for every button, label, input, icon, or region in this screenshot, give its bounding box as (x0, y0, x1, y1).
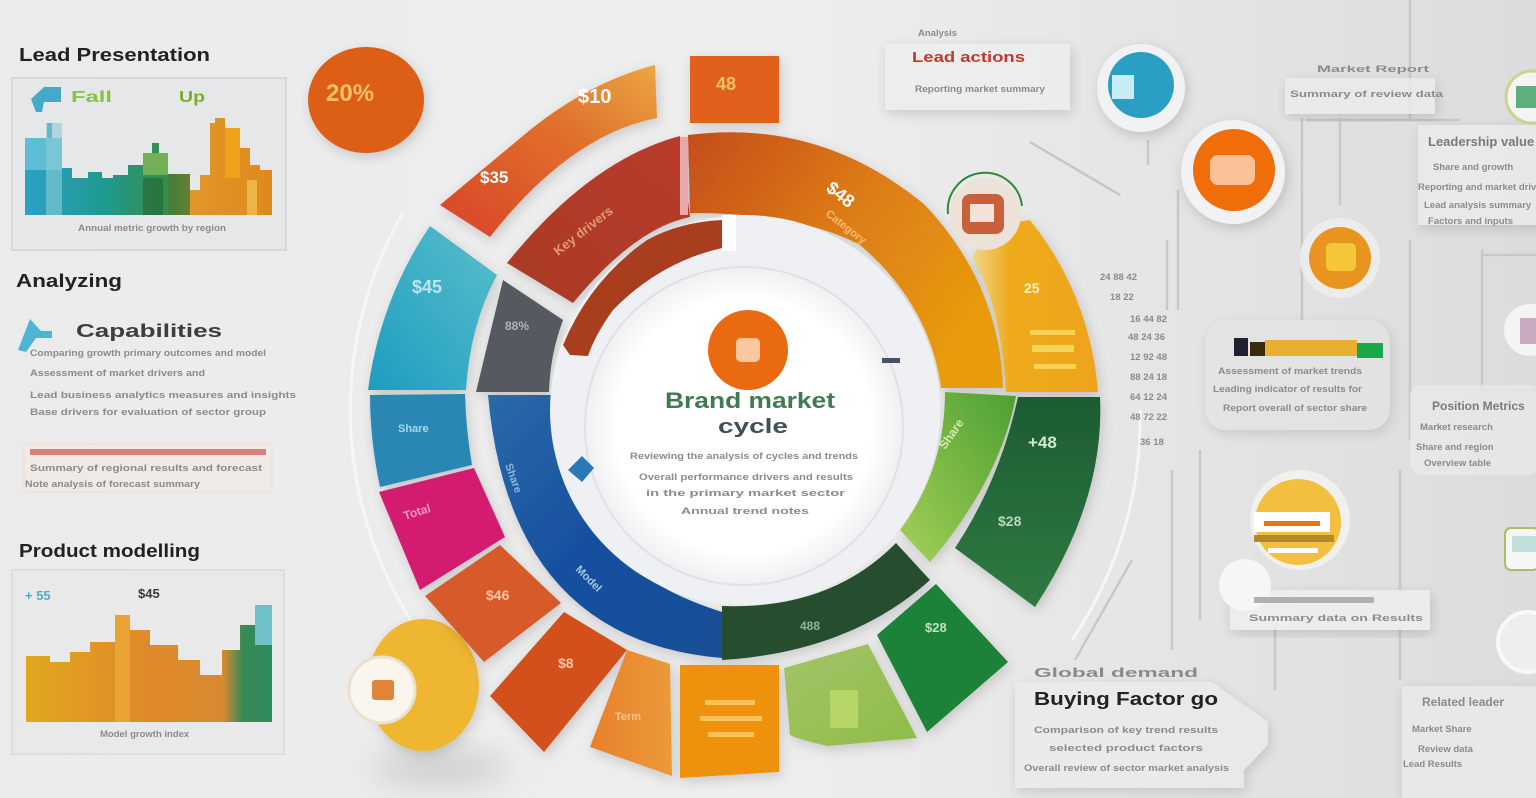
label: Share (936, 416, 967, 452)
segment: orange (590, 650, 672, 776)
segment: blue left (370, 394, 472, 487)
segment: magenta (379, 468, 505, 590)
data table faint text: 16 44 82 (1130, 314, 1167, 325)
segment: gray (476, 280, 563, 392)
segment: green block (877, 584, 1008, 732)
heading: lead presentation: Lead Presentation (19, 45, 210, 65)
label: Market Report (1317, 64, 1430, 75)
label: 88% (505, 319, 529, 333)
callout: gold badge text (1219, 559, 1430, 630)
icon: legend arrow (31, 87, 61, 112)
callout: bottom right text: Lead Results (1403, 759, 1462, 770)
callout: top text (885, 28, 1070, 110)
callout: bottom right text (1402, 686, 1536, 798)
center body text: in the primary market sector (646, 488, 845, 499)
body: Overall review of sector market analysis (1024, 763, 1229, 774)
label: +48 (1028, 433, 1057, 452)
callout: bottom text (1015, 665, 1268, 788)
segment: light green bottom (784, 644, 917, 746)
highlight bar (30, 449, 266, 455)
callout: top orange badge (308, 47, 424, 153)
skyline bar chart (25, 118, 272, 215)
data table faint text (1100, 272, 1168, 448)
body: Comparison of key trend results (1034, 725, 1218, 736)
panel: analyzing (16, 271, 296, 492)
body: Summary data on Results (1249, 613, 1423, 624)
subheading: capabilities: Capabilities (76, 321, 222, 341)
data table faint text: 12 92 48 (1130, 352, 1167, 363)
center body text: Reviewing the analysis of cycles and trends (630, 451, 858, 462)
callout: bottom right text: Review data (1418, 744, 1474, 755)
icon: small badge on orange arc (948, 173, 1022, 250)
chart: radial segments (368, 56, 1100, 778)
segment: yellow (972, 220, 1098, 392)
highlight box (24, 444, 272, 492)
gradient title (1234, 338, 1383, 358)
body: selected product factors (1049, 743, 1203, 754)
label: Model (573, 564, 604, 595)
center body text: Overall performance drivers and results (639, 472, 853, 483)
legend labels (71, 89, 205, 106)
label: Term (615, 711, 641, 723)
icon: right edge white (1498, 612, 1536, 672)
chart card (12, 78, 286, 250)
segment: top left orange (440, 65, 657, 237)
bar (1254, 597, 1374, 603)
segment: teal (368, 226, 497, 390)
body: Share and growth (1433, 162, 1513, 173)
segment: blue ring (488, 395, 722, 658)
center body text: Annual trend notes (681, 506, 809, 517)
label: $35 (480, 168, 508, 187)
title: Lead actions (912, 49, 1025, 66)
label: $28 (925, 620, 947, 635)
center circle (550, 215, 940, 605)
callout: right mid text: Overview table (1424, 458, 1491, 469)
panel: left bottom chart (12, 541, 284, 754)
icon: teal circle (1097, 44, 1185, 132)
label: Total (402, 501, 432, 523)
marker: dark dot (882, 358, 900, 363)
inner badge (349, 657, 415, 723)
label: $48 (823, 177, 859, 212)
segment: orange red (425, 545, 561, 662)
icon: yellow circle (1300, 218, 1380, 298)
label: 48 (716, 74, 736, 94)
data table faint text: 48 24 36 (1128, 332, 1165, 343)
label: Analysis (918, 28, 957, 39)
data table faint text: 36 18 (1140, 437, 1164, 448)
legend labels: Fall (71, 89, 112, 106)
callout: right top text: Lead analysis summary (1424, 200, 1532, 211)
callout: top right label (1285, 64, 1444, 114)
label lines (1030, 330, 1076, 369)
title: Related leader (1422, 695, 1504, 709)
icon (372, 680, 394, 700)
data table faint text: 64 12 24 (1130, 392, 1168, 403)
center title: cycle (718, 416, 788, 438)
body: Reporting market summary (915, 84, 1046, 95)
callout: right top text (1418, 125, 1536, 227)
connector lines (1030, 0, 1536, 690)
highlight text: Summary of regional results and forecast (30, 463, 263, 474)
label: 25 (1024, 280, 1040, 296)
legend labels (25, 586, 160, 603)
body: Summary of review data (1290, 89, 1444, 100)
center body text (630, 451, 858, 517)
marker: blue dot (568, 456, 594, 482)
heading: product modelling: Product modelling (19, 541, 200, 561)
data table faint text: 18 22 (1110, 292, 1134, 303)
body text: Assessment of market drivers and (30, 368, 205, 379)
chart caption: Annual metric growth by region (78, 223, 226, 234)
label: $45 (412, 277, 442, 297)
segment: large orange arc (688, 132, 1003, 388)
segment: top square (690, 56, 779, 123)
highlight text 2: Note analysis of forecast summary (25, 479, 201, 490)
label: $46 (486, 587, 510, 603)
segment: orange bottom (680, 665, 779, 778)
title: Buying Factor go (1034, 689, 1218, 709)
callout: gradient title block: Report overall of sector share (1223, 403, 1367, 414)
legend labels: $45 (138, 586, 160, 601)
data table faint text: 88 24 18 (1130, 372, 1167, 383)
label: Category (823, 208, 869, 247)
label: Key drivers (551, 203, 616, 258)
center title: Brand market (665, 388, 836, 413)
segment: dark green (955, 397, 1100, 607)
segment: red orange (490, 612, 627, 752)
skyline bar chart (26, 605, 272, 722)
segment: dark red (507, 136, 690, 303)
icon: right edge pink (1504, 304, 1536, 356)
segment: dark green band (722, 543, 930, 660)
body: Assessment of market trends (1218, 366, 1362, 377)
panel: left top chart (12, 45, 286, 250)
body text: Base drivers for evaluation of sector group (30, 407, 266, 418)
pale divider strip (680, 137, 688, 215)
center title (665, 388, 836, 438)
label: $10 (578, 86, 611, 108)
inner red arc (563, 220, 722, 356)
body (1024, 725, 1229, 774)
body text (30, 348, 296, 418)
callout: gradient title block (1205, 320, 1390, 430)
label block (830, 690, 858, 728)
callout: right mid text: Share and region (1416, 442, 1494, 453)
callout: gradient title block: Leading indicator of results for (1213, 384, 1362, 395)
body text: Lead business analytics measures and insights (30, 390, 296, 401)
title: Position Metrics (1432, 399, 1525, 413)
icon: right edge green small (1505, 528, 1536, 570)
heading: analyzing: Analyzing (16, 271, 122, 291)
label: Share (398, 423, 429, 435)
data table faint text: 48 72 22 (1130, 412, 1167, 423)
icon: gold badge (1250, 470, 1350, 570)
segment: light green (900, 392, 1016, 562)
chart card (12, 570, 284, 754)
callout: right mid text (1410, 385, 1536, 475)
icon: arrow (18, 319, 52, 352)
faint outer ring (350, 213, 1140, 640)
body text: Comparing growth primary outcomes and model (30, 348, 266, 359)
callout: right top text: Factors and inputs (1428, 216, 1513, 227)
icon: right edge green (1506, 71, 1536, 123)
label: Share (502, 462, 524, 495)
legend labels: + 55 (25, 588, 51, 603)
body: Market Share (1412, 724, 1472, 735)
label: 20% (326, 80, 374, 107)
label: $28 (998, 513, 1022, 529)
data table faint text: 24 88 42 (1100, 272, 1137, 283)
wheel shadow (370, 754, 510, 782)
label: 488 (800, 619, 820, 633)
chart caption: Model growth index (100, 729, 190, 740)
title: Leadership value (1428, 134, 1534, 149)
label: $8 (558, 655, 574, 671)
icon: center orange badge (708, 310, 788, 390)
small label: Global demand (1034, 665, 1198, 680)
legend labels: Up (179, 89, 205, 106)
body: Market research (1420, 422, 1493, 433)
icon: orange circle (1181, 120, 1285, 224)
label lines (700, 700, 762, 737)
callout: bottom left yellow badge (349, 619, 479, 751)
